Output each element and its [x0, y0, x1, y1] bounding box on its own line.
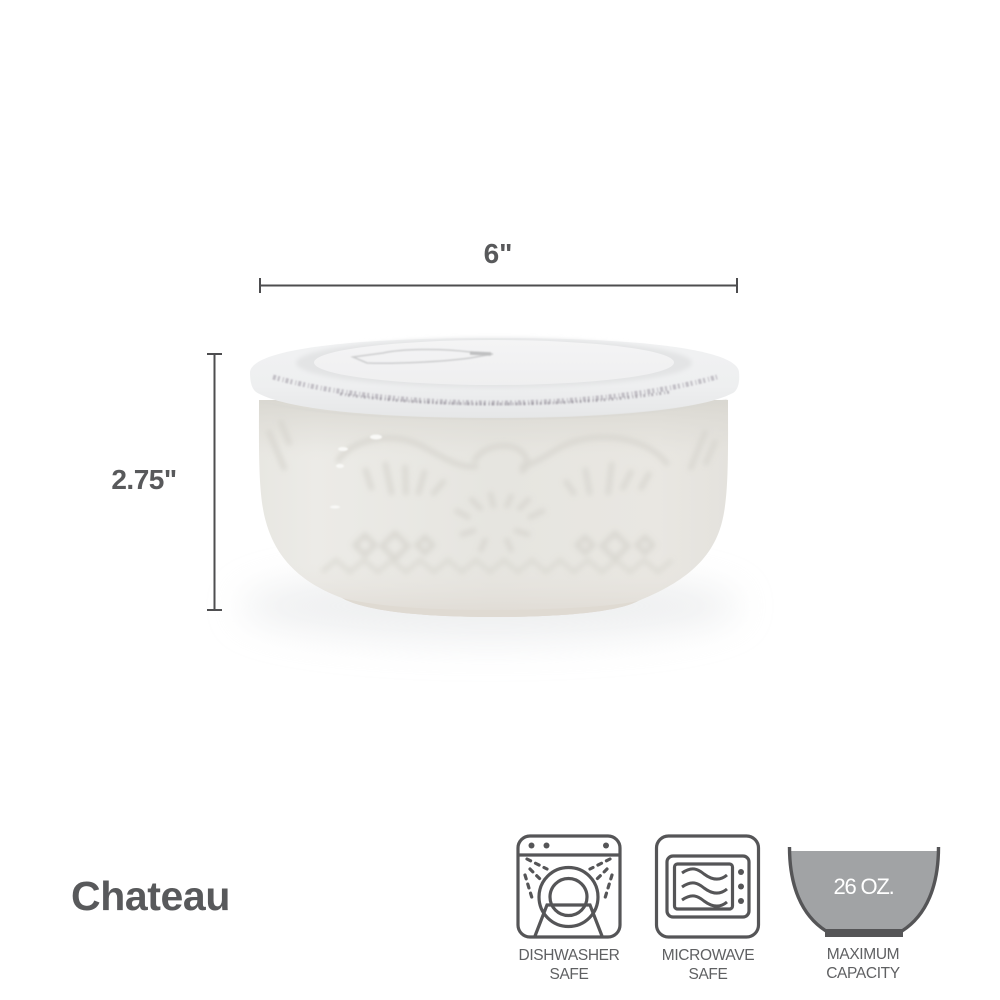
bowl foot [342, 598, 638, 617]
lid vent tab [353, 349, 493, 363]
bowl shadow [240, 570, 740, 642]
label: MICROWAVE [662, 947, 754, 964]
emboss highlights [330, 434, 382, 508]
width dimension: 6 inches: 6" [484, 238, 512, 269]
lid rim [250, 338, 739, 418]
label: MAXIMUM [827, 946, 899, 963]
icon: bowl maximum capacity 26 oz [790, 847, 938, 982]
bowl body [259, 400, 728, 617]
product photo: lidded bowl [240, 338, 740, 642]
lid rim speckled edge [262, 377, 727, 419]
icon: microwave safe: SAFE [688, 966, 728, 983]
lid center panel [314, 340, 674, 385]
label: DISHWASHER [518, 947, 620, 964]
icon: dishwasher safe [518, 836, 620, 983]
icon: dishwasher safe: SAFE [549, 966, 589, 983]
embossed pattern [268, 420, 716, 572]
icon: microwave safe [656, 836, 758, 983]
width dimension: 6 inches [260, 238, 737, 293]
brand name: Chateau [71, 873, 230, 919]
icon: bowl maximum capacity 26 oz: CAPACITY [826, 965, 900, 982]
icon: bowl maximum capacity 26 oz: 26 OZ. [833, 874, 894, 899]
lid inner ring [296, 338, 692, 388]
height dimension: 2.75 inches [111, 354, 222, 610]
height dimension: 2.75 inches: 2.75" [111, 464, 177, 495]
